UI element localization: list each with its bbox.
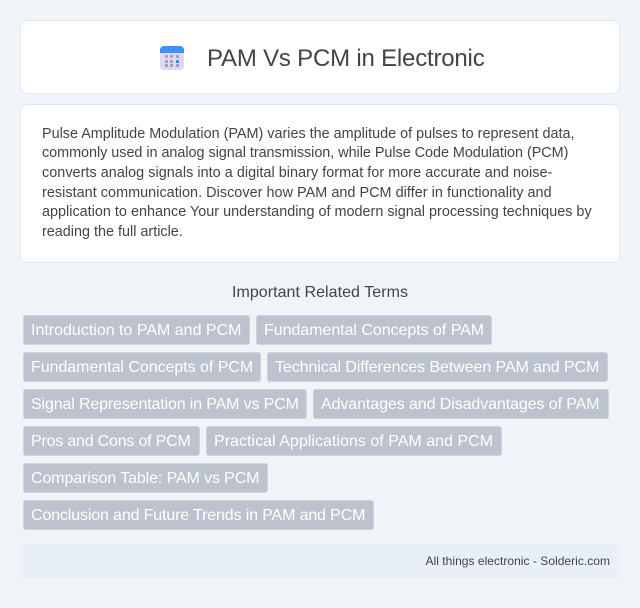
icon: calendar [160,46,184,70]
text block: description: reading the full article. [42,224,183,240]
term chip [23,389,307,419]
footer [20,544,620,578]
term chip [23,500,374,530]
term chip: Advantages and Disadvantages of PAM [321,396,600,413]
term chip [23,463,268,493]
term chip [256,315,492,345]
title card [20,20,620,94]
term chip [23,426,200,456]
term chip [206,426,502,456]
panel: description [20,104,620,263]
text block: description [42,126,592,240]
text block: description: resistant communication. Discover how PAM and PCM differ in functionality and [42,185,552,201]
text block: description: converts analog signals into a digital binary format for more accurate and noise- [42,165,552,181]
text block: description: commonly used in analog signal transmission, while Pulse Code Modulation (PCM) [42,145,568,161]
footer: All things electronic - Solderic.com [426,554,610,568]
text block: description: Pulse Amplitude Modulation (PAM) varies the amplitude of pulses to represent data, [42,126,574,142]
term chip: Practical Applications of PAM and PCM [214,433,493,450]
term chip: Pros and Cons of PCM [31,433,191,450]
term chip [23,352,261,382]
term chip: Conclusion and Future Trends in PAM and PCM [31,507,365,524]
term chip [23,315,250,345]
related terms list [23,315,609,530]
term chip: Fundamental Concepts of PCM [31,359,253,376]
term chip [313,389,609,419]
term chip: Fundamental Concepts of PAM [264,322,484,339]
term chip [267,352,608,382]
text block: description: application to enhance Your understanding of modern signal processing techniques by [42,204,592,220]
title: PAM Vs PCM in Electronic [207,45,484,72]
term chip: Comparison Table: PAM vs PCM [31,470,259,487]
term chip: Technical Differences Between PAM and PCM [275,359,599,376]
term chip: Introduction to PAM and PCM [31,322,241,339]
term chip: Signal Representation in PAM vs PCM [31,396,299,413]
heading: related terms: Important Related Terms [232,284,408,301]
